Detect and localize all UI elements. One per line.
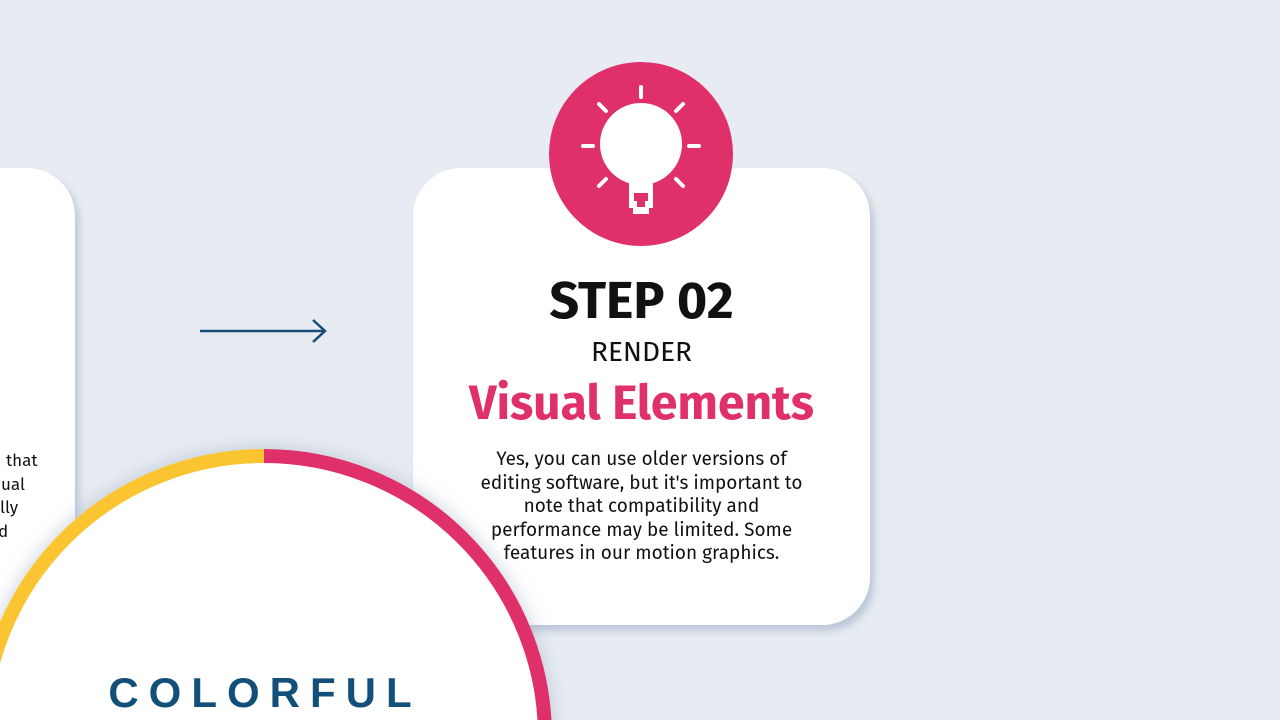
text block: left card body fragment: that (6, 450, 37, 471)
icon: lightbulb badge (549, 62, 733, 246)
text block: left card body fragment: lly (0, 497, 18, 518)
text block: left card body fragment (0, 450, 38, 542)
text block: left card body fragment: ual (1, 474, 25, 494)
heading: STEP 02: STEP 02 (549, 269, 734, 332)
subheading: RENDER: RENDER (591, 336, 692, 369)
text block: description: Yes, you can use older versions of editing software, but it's important to note that compatibility and performance may be limited. Some features in our motion graphics. (481, 448, 802, 565)
arrow (200, 319, 327, 343)
panel: left card (step 01, partially off-screen) (0, 168, 75, 628)
heading: COLORFUL: COLORFUL (108, 669, 422, 716)
panel: step 02 card (413, 168, 870, 625)
title: Visual Elements: Visual Elements (469, 374, 814, 432)
